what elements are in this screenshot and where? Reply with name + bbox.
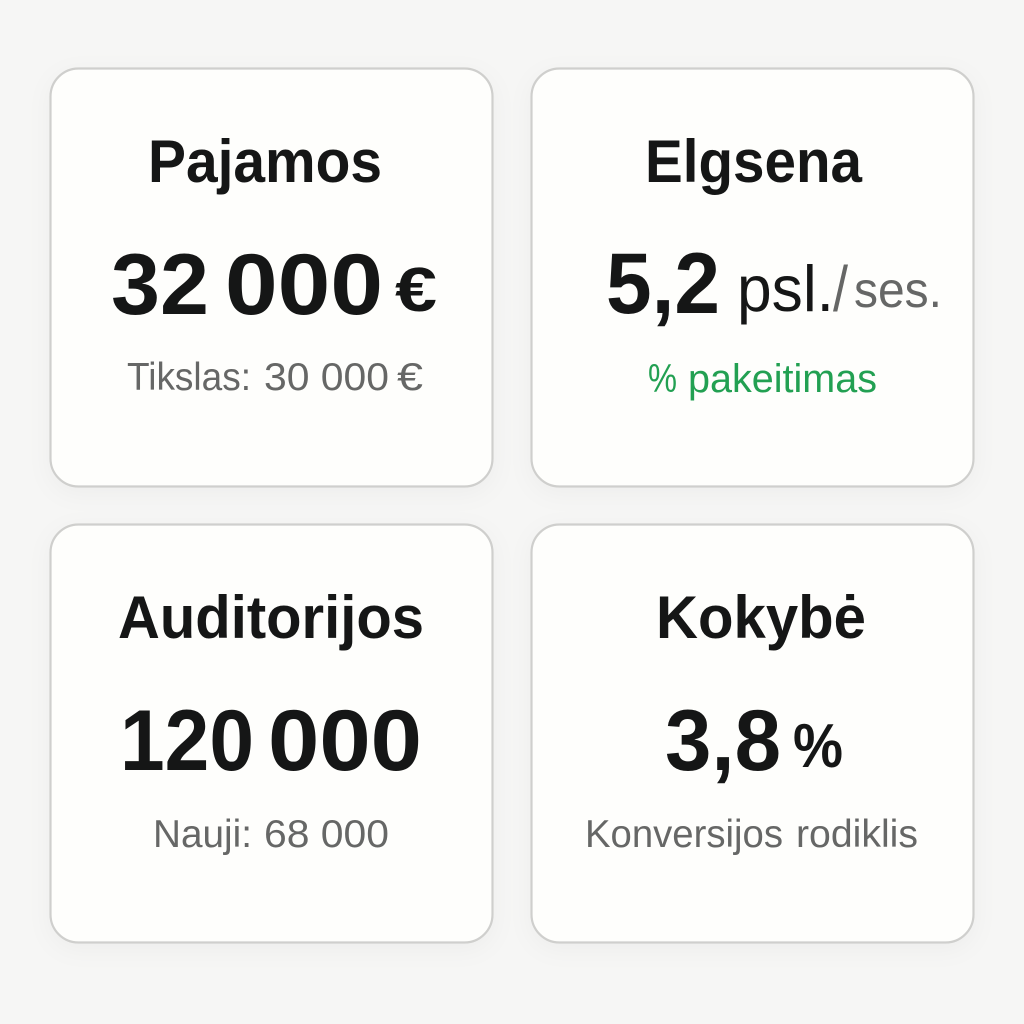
- text: conversion rate: Konversijos: [585, 813, 783, 856]
- value: 5,2 psl./ses.: ses.: [854, 262, 942, 318]
- heading: Pajamos: Pajamos: [148, 128, 382, 195]
- text: conversion rate: [585, 813, 918, 856]
- value: 120 000: 120: [120, 693, 254, 789]
- value: 32 000 €: 000: [225, 237, 383, 333]
- text: change: pakeitimas: [688, 357, 877, 401]
- text: change: %: [648, 357, 677, 401]
- value: 5,2 psl./ses.: 5,2: [606, 236, 720, 332]
- value: 5,2 psl./ses.: /: [833, 253, 848, 325]
- text: new: Nauji:: [153, 813, 252, 856]
- panel: Auditorijos: [50, 524, 492, 942]
- value: 32 000 €: €: [395, 256, 437, 325]
- heading: Auditorijos: Auditorijos: [118, 584, 424, 651]
- text: target: 30 000: [264, 356, 389, 399]
- text: target: [127, 356, 423, 399]
- text: new: 68 000: [264, 813, 389, 856]
- text: conversion rate: rodiklis: [796, 813, 918, 856]
- value: 5,2 psl./ses.: [606, 236, 942, 332]
- text: new: [153, 813, 389, 856]
- value: 3,8 %: %: [793, 712, 843, 781]
- value: 32 000 €: [111, 237, 437, 333]
- value: 3,8 %: 3,8: [665, 693, 781, 789]
- value: 3,8 %: [665, 693, 843, 789]
- heading: Elgsena: Elgsena: [645, 128, 863, 195]
- value: 32 000 €: 32: [111, 237, 209, 333]
- text: target: €: [397, 356, 423, 399]
- value: 120 000: [120, 693, 422, 789]
- panel: Elgsena: [532, 68, 974, 486]
- value: 5,2 psl./ses.: psl.: [737, 252, 834, 325]
- panel: Kokybė: [532, 524, 974, 942]
- panel: Pajamos: [50, 68, 492, 486]
- value: 120 000: 000: [268, 693, 422, 789]
- heading: Kokybė: Kokybė: [656, 584, 866, 651]
- text: target: Tikslas:: [127, 356, 251, 399]
